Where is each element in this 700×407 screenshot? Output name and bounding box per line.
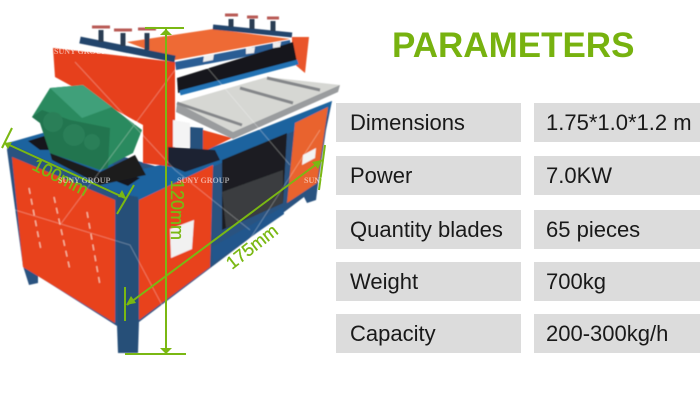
row: capacity label: Capacity bbox=[350, 321, 436, 346]
dimension labels: 120mm bbox=[167, 180, 187, 240]
row: capacity value: 200-300kg/h bbox=[546, 321, 668, 346]
row: power value bbox=[534, 156, 700, 195]
row: dimensions label bbox=[336, 103, 521, 142]
row: weight value: 700kg bbox=[546, 269, 606, 294]
watermark text: SUNY bbox=[304, 176, 326, 185]
dimension labels bbox=[29, 155, 282, 273]
watermark text: SUNY GROUP bbox=[177, 176, 229, 185]
gearbox bbox=[32, 85, 146, 185]
watermark lines bbox=[15, 62, 320, 320]
title: PARAMETERS bbox=[392, 26, 634, 65]
row: blades label bbox=[336, 210, 521, 249]
ventilation slots bbox=[29, 188, 100, 285]
dimension lines bbox=[2, 28, 325, 354]
row: capacity label bbox=[336, 314, 521, 353]
feed table bbox=[176, 77, 340, 139]
watermark text: SUNY GROUP bbox=[54, 47, 106, 56]
row: dimensions value bbox=[534, 103, 700, 142]
dimension labels: 100mm bbox=[29, 155, 92, 200]
row: power value: 7.0KW bbox=[546, 163, 612, 188]
row: power label bbox=[336, 156, 521, 195]
row: blades value: 65 pieces bbox=[546, 217, 640, 242]
dimension arrowheads bbox=[4, 29, 322, 354]
row: capacity value bbox=[534, 314, 700, 353]
row: blades label: Quantity blades bbox=[350, 217, 503, 242]
row: power label: Power bbox=[350, 163, 412, 188]
row: weight label: Weight bbox=[350, 269, 418, 294]
data plate bbox=[170, 220, 194, 258]
machine illustration with dimensions bbox=[1, 12, 340, 355]
row: blades value bbox=[534, 210, 700, 249]
watermark text: SUNY GROUP bbox=[58, 176, 110, 185]
row: dimensions value: 1.75*1.0*1.2 m bbox=[546, 110, 692, 135]
row: weight value bbox=[534, 262, 700, 301]
adjustment bars and handwheels bbox=[80, 15, 292, 59]
upper orange housing bbox=[53, 29, 309, 172]
dimension labels: 175mm bbox=[222, 220, 282, 273]
row: dimensions label: Dimensions bbox=[350, 110, 465, 135]
row: weight label bbox=[336, 262, 521, 301]
cutter head with blades bbox=[175, 40, 298, 93]
watermark text bbox=[54, 47, 326, 185]
machine base frame bbox=[7, 101, 332, 353]
